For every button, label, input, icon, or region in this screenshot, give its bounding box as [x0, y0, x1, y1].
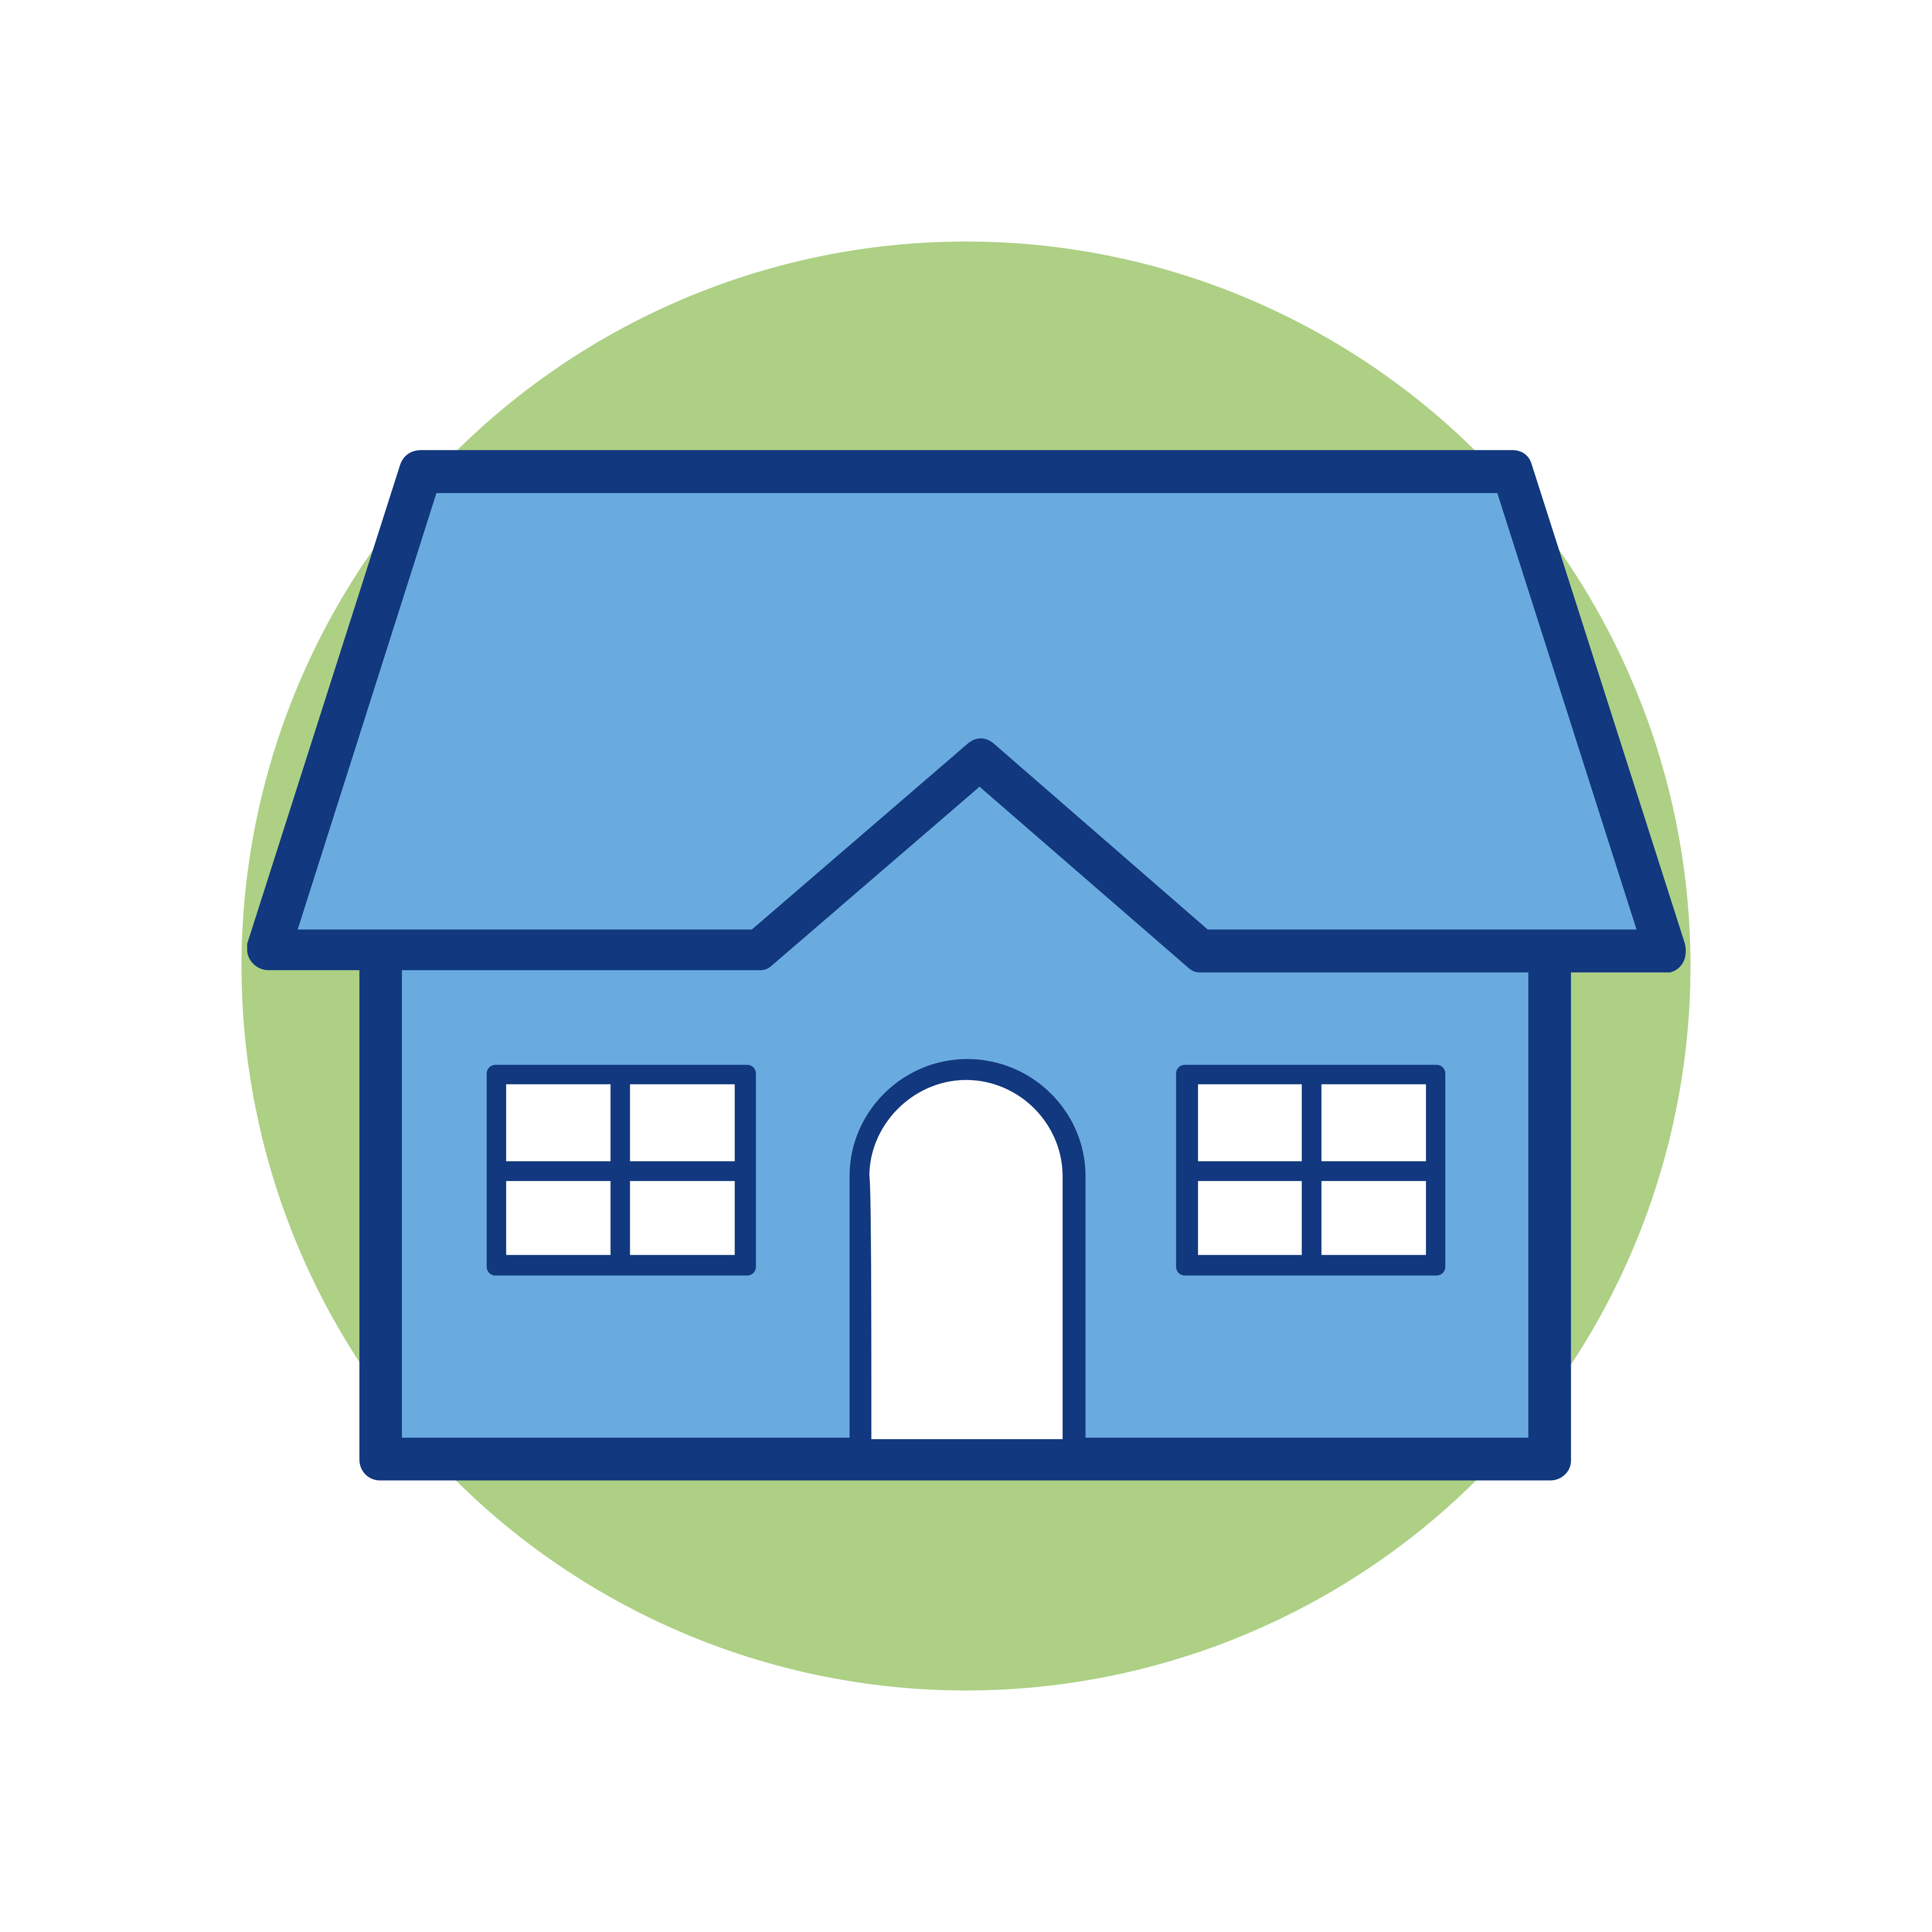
window frame	[1176, 1065, 1445, 1275]
door frame	[849, 1059, 1085, 1444]
window frame	[487, 1065, 756, 1275]
house	[247, 450, 1686, 1481]
window panes	[506, 1084, 735, 1255]
door	[849, 1059, 1085, 1444]
roof	[298, 493, 1637, 930]
window panes	[1198, 1084, 1426, 1255]
house outline	[247, 450, 1686, 1481]
left window	[487, 1065, 756, 1275]
door panel	[869, 1080, 1063, 1439]
right window	[1176, 1065, 1445, 1275]
wall	[402, 787, 1528, 1438]
background circle	[242, 242, 1690, 1690]
